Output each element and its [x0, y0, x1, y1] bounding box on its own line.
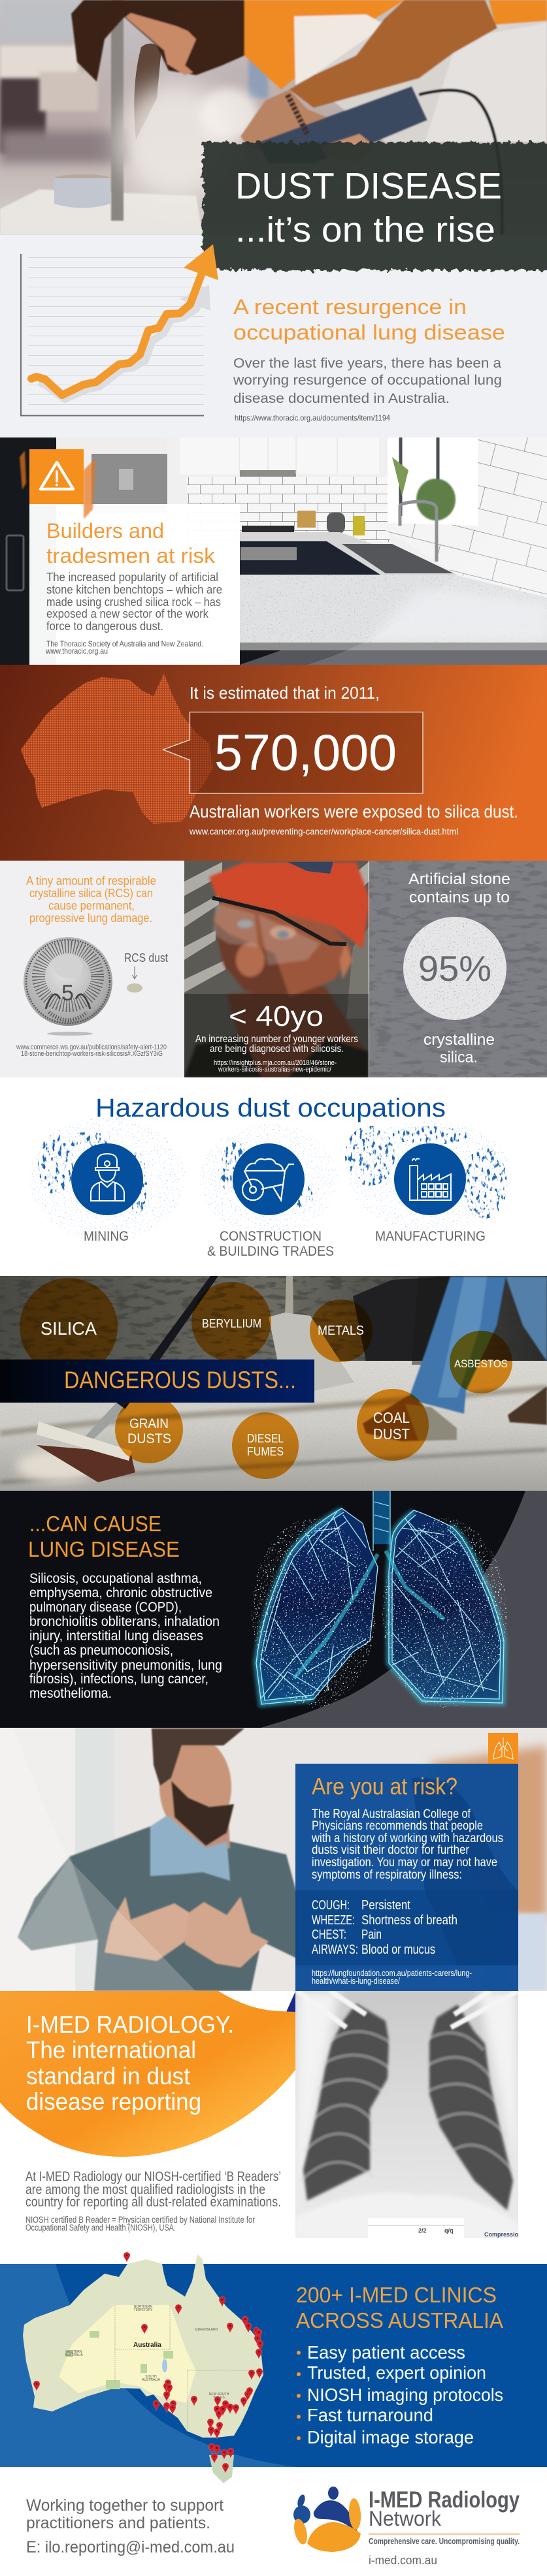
resurgence body text: [233, 356, 502, 406]
resurgence body text: disease documented in Australia.: [233, 391, 450, 406]
younger workers source: workers-silicosis-australias-new-epidemic/: [218, 1066, 332, 1073]
symptom list: WHEEZE:: [312, 1913, 355, 1928]
lung disease list: fibrosis), infections, lung cancer,: [29, 1672, 208, 1687]
RCS text: A tiny amount of respirable: [26, 874, 156, 887]
logo: I-MED wordmark: I-MED Radiology: [369, 2487, 520, 2513]
map: Australia with clinic pins: AUSTRALIA: [142, 2378, 161, 2382]
map: Australia with clinic pins: QUEENSLAND: [195, 2328, 218, 2332]
logo: I-MED wordmark: i-med.com.au: [369, 2554, 437, 2567]
RCS dust label and arrow: [124, 951, 168, 993]
heading: clinics: ACROSS AUSTRALIA: [296, 2308, 503, 2332]
RCS source: www.commerce.wa.gov.au/publications/safety-alert-1120: [16, 1043, 167, 1051]
title line one: DUST DISEASE: [235, 165, 502, 207]
map: Australia with clinic pins: NEW SOUTH: [209, 2393, 229, 2396]
under 40 statistic: < 40yo: [229, 1000, 323, 1032]
dust labels: METALS: [318, 1324, 364, 1338]
dust labels: SILICA: [41, 1318, 97, 1339]
lung disease list: pulmonary disease (COPD),: [29, 1600, 182, 1615]
artificial stone text: contains up to: [409, 889, 510, 906]
map: Australia with clinic pins: SOUTH: [145, 2375, 157, 2379]
RCS text: progressive lung damage.: [29, 912, 152, 925]
big number: 570,000: [214, 724, 397, 781]
label: construction and building trades: [207, 1229, 334, 1259]
B readers paragraph: At I-MED Radiology our NIOSH-certified ‘B Readers’: [25, 2169, 281, 2184]
occupation: construction: [200, 1124, 337, 1259]
lung disease list: injury, interstitial lung diseases: [29, 1629, 203, 1644]
dust bubbles: [20, 1278, 512, 1479]
symptom list: Shortness of breath: [361, 1913, 457, 1928]
map: Australia with clinic pins: WALES: [213, 2396, 225, 2400]
dust labels: DUSTS: [127, 1431, 171, 1446]
chest x-ray: Compression:: [484, 2231, 524, 2238]
builders body text: exposed a new sector of the work: [46, 607, 209, 620]
callout box with pointer: [163, 712, 423, 793]
dust labels: BERYLLIUM: [202, 1317, 261, 1330]
resurgence body text: worrying resurgence of occupational lung: [233, 373, 502, 388]
panel: silica exposure statistic: [0, 665, 547, 861]
heading: can cause lung disease: [30, 1516, 179, 1557]
RCS dust label and arrow: RCS dust: [124, 951, 168, 964]
builders body text: made using crushed silica rock – has: [46, 596, 221, 609]
map: Australia with clinic pins: AUSTRALIA: [65, 2353, 84, 2357]
heading: can cause lung disease: ...CAN CAUSE: [29, 1512, 161, 1536]
RCS text: cause permanent,: [48, 899, 135, 912]
younger workers source: https://insightplus.mja.com.au/2018/46/stone-: [214, 1059, 337, 1067]
panel: can cause lung disease: [0, 1491, 547, 1730]
icon: five cent coin: [24, 937, 112, 1036]
dust splatter: [200, 1124, 337, 1235]
orange blob: I-MED radiology: [0, 1991, 295, 2157]
icon: five cent coin: 5: [61, 981, 74, 1006]
bullet list: Fast turnaround: [307, 2405, 433, 2425]
panel: younger workers photo: [184, 861, 370, 1077]
banner: dangerous dusts: [0, 1360, 314, 1403]
chest x-ray: 2/2: [418, 2227, 427, 2234]
artificial stone text: Artificial stone: [408, 870, 510, 888]
RCS source: [16, 1043, 167, 1058]
map: Australia with clinic pins: [23, 2252, 263, 2483]
logo: I-MED wordmark: [369, 2487, 520, 2567]
dust labels: GRAIN: [129, 1416, 169, 1431]
occupation: mining: [29, 1117, 186, 1244]
label: construction and building trades: CONSTRUCTION: [220, 1229, 322, 1244]
B readers paragraph: [25, 2169, 281, 2210]
lung disease list: emphysema, chronic obstructive: [29, 1585, 212, 1600]
chest x-ray: [295, 1991, 524, 2238]
heading: clinics: [296, 2283, 503, 2332]
map: Australia with clinic pins: NORTHERN: [134, 2305, 153, 2309]
speckled stone circle: 95%: [418, 948, 491, 989]
B reader definition: NIOSH certified B Reader = Physician certified by National Institute for: [25, 2214, 255, 2225]
younger workers caption: [195, 1034, 358, 1055]
panel: clinics across Australia: [0, 2252, 547, 2483]
map: Australia with clinic pins: TERRITORY: [134, 2308, 153, 2312]
builders source: The Thoracic Society of Australia and New Zealand.: [46, 639, 203, 648]
heading: recent resurgence: [233, 295, 505, 344]
illustration: glowing lungs: [252, 1491, 506, 1708]
risk paragraph: Physicians recommends that people: [312, 1819, 483, 1833]
bullet list: NIOSH imaging protocols: [307, 2385, 503, 2405]
title line two: ...it’s on the rise: [235, 210, 495, 249]
footer contact text: practitioners and patients.: [26, 2514, 210, 2532]
heading: builders: tradesmen at risk: [46, 544, 216, 567]
heading: I-MED radiology: standard in dust: [26, 2063, 191, 2090]
panel: artificial stone 95 percent: [369, 861, 547, 1077]
lung particles: [252, 1518, 506, 1708]
icon: factory: [394, 1143, 466, 1215]
crystalline silica text: [423, 1031, 495, 1066]
map: Australia with clinic pins: WESTERN: [65, 2350, 82, 2354]
banner: dangerous dusts: DANGEROUS DUSTS...: [64, 1367, 296, 1393]
heading: builders: Builders and: [46, 519, 164, 543]
builders source: [45, 639, 203, 656]
icon: lungs on orange tile: [488, 1733, 518, 1764]
lung disease list: (such as pneumoconiosis,: [29, 1643, 173, 1658]
risk paragraph: [311, 1807, 503, 1882]
map: Australia with clinic pins: Australia: [133, 2342, 161, 2349]
dust labels: DUST: [373, 1425, 410, 1442]
logo: I-MED wordmark: Network: [369, 2507, 442, 2530]
stat intro: It is estimated that in 2011,: [190, 683, 380, 703]
risk paragraph: investigation. You may or may not have: [312, 1856, 497, 1869]
lung disease list: mesothelioma.: [29, 1686, 112, 1701]
builders body text: force to dangerous dust.: [46, 620, 163, 633]
panel: are you at risk photo: [0, 1728, 547, 1991]
bullet list: Digital image storage: [307, 2427, 474, 2447]
footer contact text: E: ilo.reporting@i-med.com.au: [26, 2538, 235, 2556]
symptom list: Persistent: [361, 1898, 410, 1913]
younger workers caption: An increasing number of younger workers: [195, 1034, 358, 1045]
symptom list: CHEST:: [312, 1928, 346, 1942]
lung disease list: Silicosis, occupational asthma,: [29, 1571, 202, 1586]
younger workers source: [214, 1059, 337, 1073]
dust labels: [41, 1317, 508, 1458]
stat conclusion: Australian workers were exposed to silica dust.: [190, 802, 518, 821]
heading: can cause lung disease: LUNG DISEASE: [28, 1537, 180, 1561]
symptom list: Pain: [361, 1928, 382, 1942]
dust labels: COAL: [373, 1409, 410, 1426]
source link: https://www.thoracic.org.au/documents/item/1194: [235, 413, 390, 422]
artificial stone text: [408, 870, 510, 906]
risk paragraph: symptoms of respiratory illness:: [312, 1868, 462, 1882]
dust labels: ASBESTOS: [454, 1358, 508, 1370]
younger workers text: [195, 1000, 358, 1073]
B readers paragraph: are among the most qualified radiologists in the: [25, 2182, 265, 2197]
speckled stone circle: [403, 917, 506, 1020]
risk source: health/what-is-lung-disease/: [312, 1976, 400, 1986]
heading: I-MED radiology: disease reporting: [26, 2088, 201, 2115]
dust splatter: [29, 1117, 186, 1241]
label: construction and building trades: & BUILDING TRADES: [207, 1244, 334, 1259]
section: resurgence background: [0, 235, 547, 437]
heading: I-MED radiology: The international: [26, 2037, 196, 2063]
dust labels: DIESEL: [247, 1432, 284, 1445]
crystalline silica text: crystalline: [423, 1031, 495, 1049]
heading: I-MED radiology: [26, 2011, 234, 2115]
risk source: https://lungfoundation.com.au/patients-carers/lung-: [312, 1968, 472, 1978]
risk source: [312, 1968, 472, 1986]
kitchen photo: [0, 437, 547, 665]
heading: recent resurgence: occupational lung disease: [233, 321, 505, 344]
B reader definition: [25, 2214, 255, 2233]
RCS source: 18-stone-benchtop-workers-risk-silicosis#.XGzfSY3iG: [21, 1050, 163, 1058]
crystalline silica text: silica.: [440, 1049, 478, 1066]
panel: are you at risk: [295, 1733, 518, 1991]
panel: tiny amount of RCS: [0, 861, 184, 1077]
symptom list: COUGH:: [312, 1898, 350, 1913]
builders body text: [46, 571, 222, 633]
RCS text: crystalline silica (RCS) can: [29, 887, 153, 900]
heading: hazardous dust occupations: Hazardous dust occupations: [95, 1094, 446, 1122]
lung disease list: bronchiolitis obliterans, inhalation: [29, 1614, 220, 1629]
footer contact text: [26, 2496, 235, 2556]
dust labels: FUMES: [247, 1445, 284, 1458]
risk paragraph: dusts visit their doctor for further: [312, 1843, 470, 1857]
builders body text: stone kitchen benchtops – which are: [46, 583, 222, 596]
B readers paragraph: country for reporting all dust-related examinations.: [25, 2195, 281, 2210]
bullet list: [297, 2342, 503, 2447]
builders body text: The increased popularity of artificial: [46, 571, 218, 584]
heading: recent resurgence: A recent resurgence in: [233, 295, 467, 319]
icon: wheelbarrow: [233, 1143, 305, 1215]
heading: are you at risk: Are you at risk?: [312, 1773, 457, 1800]
label: manufacturing: MANUFACTURING: [375, 1229, 486, 1244]
bullet list: Easy patient access: [307, 2342, 465, 2362]
panel: builders and tradesmen: [20, 449, 240, 665]
risk paragraph: The Royal Australasian College of: [312, 1807, 471, 1821]
RCS text: [26, 874, 156, 925]
lung disease list: hypersensitivity pneumonitis, lung: [29, 1658, 222, 1673]
map: dotted Australia: [21, 673, 213, 824]
footer contact text: Working together to support: [26, 2496, 224, 2515]
icon: miner: [71, 1143, 143, 1215]
icon: warning triangle on orange tile: [20, 449, 95, 519]
stat source: www.cancer.org.au/preventing-cancer/workplace-cancer/silica-dust.html: [189, 826, 458, 836]
bullet list: Trusted, expert opinion: [307, 2362, 486, 2383]
label: mining: MINING: [84, 1229, 129, 1244]
logo: I-MED symbol: [291, 2487, 362, 2552]
lung disease list: [29, 1571, 222, 1701]
B reader definition: Occupational Safety and Health (NIOSH), USA.: [25, 2222, 176, 2233]
resurgence body text: Over the last five years, there has been a: [233, 356, 501, 371]
risk paragraph: with a history of working with hazardous: [311, 1832, 503, 1845]
occupation: manufacturing: [345, 1120, 512, 1244]
panel: dangerous dusts photo: [0, 1276, 547, 1491]
symptom list: Blood or mucus: [361, 1943, 435, 1957]
builders source: www.thoracic.org.au: [45, 646, 108, 656]
chest x-ray: q/q: [444, 2227, 454, 2234]
heading: clinics: 200+ I-MED CLINICS: [296, 2283, 497, 2307]
heading: builders: [46, 519, 216, 567]
dust splatter: [345, 1120, 512, 1231]
symptom list: AIRWAYS:: [312, 1943, 358, 1957]
heading: I-MED radiology: I-MED RADIOLOGY.: [26, 2011, 234, 2038]
symptom list: [312, 1898, 457, 1957]
title banner: [203, 142, 547, 270]
younger workers caption: are being diagnosed with silicosis.: [210, 1043, 344, 1055]
line chart with rising arrow: [21, 244, 218, 415]
hero photo: worker grinding stone: [0, 0, 547, 235]
